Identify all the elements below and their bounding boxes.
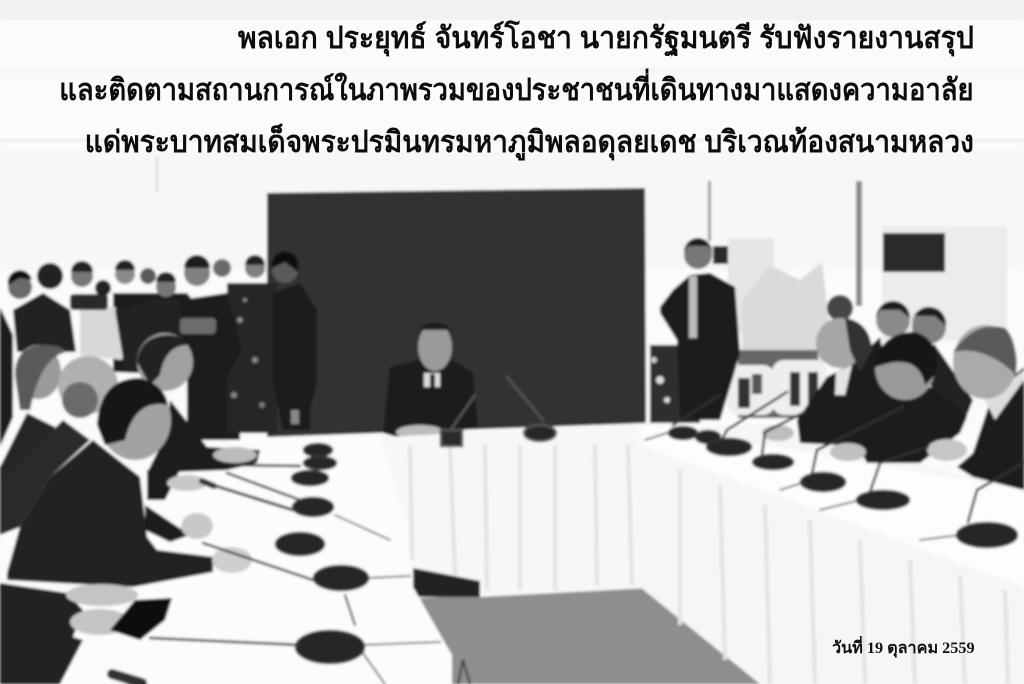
left seated officials — [0, 333, 260, 587]
left standing crowd and photographers — [0, 255, 277, 447]
tablecloth pleats — [410, 445, 1008, 684]
central seated leader — [383, 323, 478, 439]
microphones left table — [112, 444, 470, 684]
bottom-left official with hands — [0, 583, 172, 684]
right seated officials — [762, 295, 1024, 490]
white plastic chairs — [727, 360, 827, 415]
microphones right table — [645, 392, 1024, 547]
floor — [420, 587, 760, 684]
microphones centre table — [441, 377, 556, 446]
standing aide left — [272, 252, 317, 430]
dark backdrop panel — [267, 188, 646, 437]
white tablecloth tables — [60, 424, 1024, 684]
date caption: วันที่ 19 ตุลาคม 2559 — [832, 639, 975, 657]
standing aide right — [660, 238, 740, 420]
air conditioner units — [713, 226, 1007, 341]
headline line 2: และติดตามสถานการณ์ในภาพรวมของประชาชนที่เดินทางมาแสดงความอาลัย — [60, 74, 974, 107]
headline line 3: แด่พระบาทสมเด็จพระปรมินทรมหาภูมิพลอดุลยเดช บริเวณท้องสนามหลวง — [85, 126, 974, 159]
plants right — [650, 262, 830, 423]
headline line 1: พลเอก ประยุทธ์ จันทร์โอชา นายกรัฐมนตรี รับฟังรายงานสรุป — [238, 22, 974, 55]
